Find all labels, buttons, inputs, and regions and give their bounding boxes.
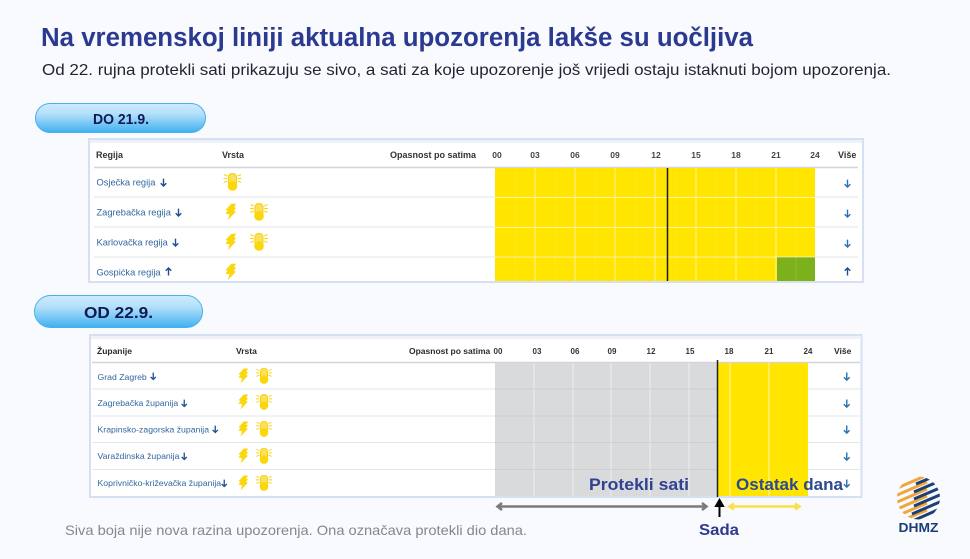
- county names: Grad Zagreb: [98, 372, 147, 382]
- table header: 12: [651, 150, 661, 160]
- label: ostatak dana: Ostatak dana: [736, 476, 844, 494]
- timeline: remaining yellow: [718, 363, 808, 496]
- table header: Županije: [97, 345, 132, 356]
- table header: 15: [686, 347, 695, 356]
- table header: 18: [731, 150, 741, 160]
- table header: 18: [725, 347, 734, 356]
- table header: 06: [571, 347, 580, 356]
- pill: od 22.9.: OD 22.9.: [84, 305, 153, 322]
- table header: 00: [494, 347, 503, 356]
- footnote: Siva boja nije nova razina upozorenja. Ona označava protekli dio dana.: [65, 522, 527, 538]
- county names: [98, 372, 227, 488]
- table header: 24: [804, 347, 813, 356]
- more arrows: [844, 372, 850, 487]
- table header: Vrsta: [222, 150, 245, 160]
- green segment: [777, 257, 815, 281]
- pill: od 22.9.: [34, 296, 202, 328]
- table header: 12: [647, 347, 656, 356]
- arrow: now: [716, 500, 723, 517]
- arrow: elapsed hours: [498, 503, 706, 510]
- current time line: [716, 360, 718, 497]
- label: sada: Sada: [699, 522, 739, 539]
- logo: DHMZ: DHMZ: [898, 521, 939, 535]
- region names: Karlovačka regija: [96, 238, 169, 248]
- table header: 24: [810, 150, 820, 160]
- table header: Više: [838, 150, 856, 160]
- table header: 03: [533, 347, 542, 356]
- table header: 21: [765, 347, 774, 356]
- county names: Koprivničko-križevačka županija: [98, 478, 221, 488]
- panel: table until 21.9.: [89, 139, 863, 282]
- table header: Opasnost po satima: [390, 150, 477, 160]
- table header: [97, 345, 852, 356]
- table header: Regija: [96, 150, 124, 160]
- table header: 00: [492, 150, 502, 160]
- arrow: remaining hours: [730, 504, 800, 510]
- panel: table from 22.9.: [90, 335, 862, 497]
- more arrows: [845, 180, 850, 275]
- pill: do 21.9.: DO 21.9.: [93, 112, 149, 128]
- table header: 03: [530, 150, 540, 160]
- table header: Više: [834, 346, 852, 356]
- table header: 09: [608, 347, 617, 356]
- table header: [96, 150, 856, 160]
- county names: Varaždinska županija: [98, 451, 180, 461]
- table header: 06: [570, 150, 580, 160]
- region names: Zagrebačka regija: [96, 208, 172, 218]
- table header: 09: [610, 150, 620, 160]
- logo: DHMZ: [897, 476, 940, 532]
- label: protekli sati: Protekli sati: [589, 476, 689, 494]
- county names: Krapinsko-zagorska županija: [98, 424, 209, 434]
- region names: Gospićka regija: [96, 268, 161, 278]
- timeline: elapsed grey: [495, 363, 718, 496]
- region names: [96, 178, 181, 278]
- county names: Zagrebačka županija: [98, 398, 178, 408]
- pill: do 21.9.: [36, 104, 206, 132]
- current time line: [666, 168, 668, 281]
- table header: 15: [691, 150, 701, 160]
- title: Na vremenskoj liniji aktualna upozorenja lakše su uočljiva: [41, 24, 754, 52]
- timeline bars: [495, 168, 815, 281]
- table header: 21: [771, 150, 781, 160]
- region names: Osječka regija: [96, 178, 156, 188]
- warning icons: [224, 174, 268, 280]
- table header: Vrsta: [236, 346, 257, 356]
- warning icons: [238, 368, 272, 491]
- subtitle: Od 22. rujna protekli sati prikazuju se sivo, a sati za koje upozorenje još vrijedi ostaju istaknuti bojom upozorenja.: [42, 62, 891, 79]
- table header: Opasnost po satima: [409, 346, 491, 356]
